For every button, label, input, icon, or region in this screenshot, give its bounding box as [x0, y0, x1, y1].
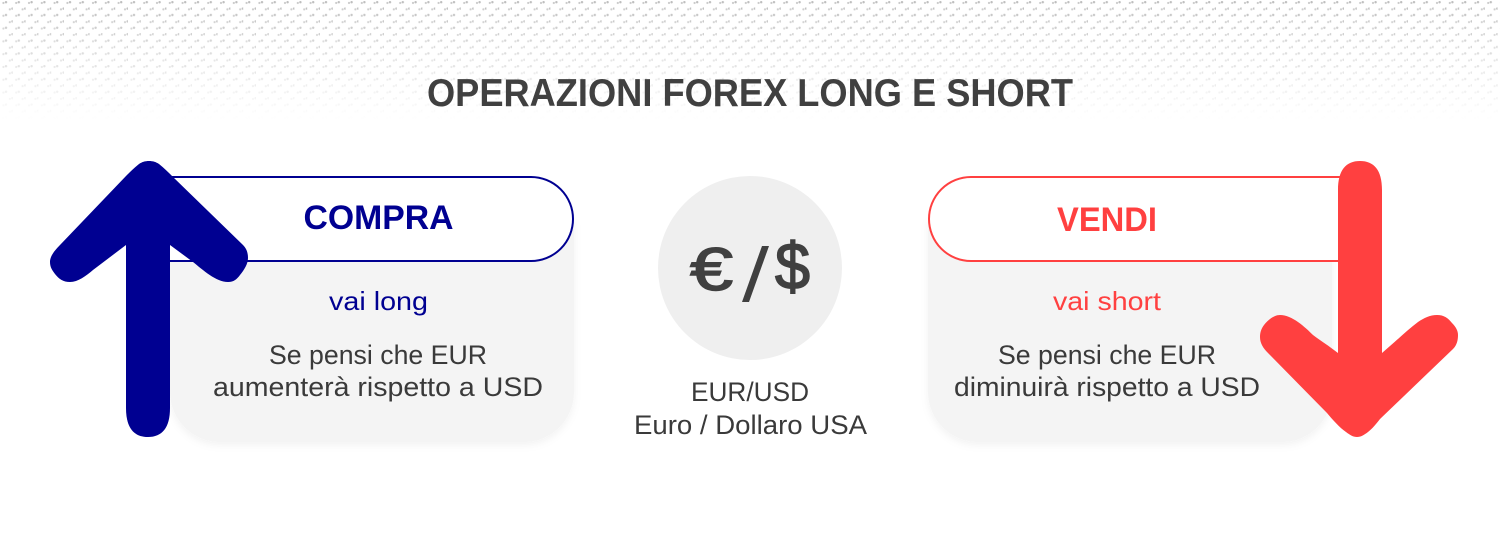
text: currency pair name: EUR/USD [691, 377, 809, 407]
button: vendi [929, 177, 1360, 261]
text: compra description: aumenterà rispetto a USD [213, 372, 543, 402]
text: vendi description [954, 340, 1260, 402]
text: vendi description: diminuirà rispetto a USD [954, 372, 1260, 402]
label: vai short: vai short [1053, 286, 1162, 316]
text: compra description: Se pensi che EUR [269, 340, 487, 370]
icon: blue up arrow [50, 161, 248, 437]
icon: euro dollar circle: € [690, 236, 733, 303]
text: compra description [213, 340, 543, 402]
button: compra: COMPRA [304, 199, 454, 237]
panel: vendi [928, 177, 1360, 442]
panel: compra [150, 177, 574, 442]
card: vendi background [928, 219, 1332, 442]
icon: euro dollar circle [658, 176, 842, 360]
text: vendi description: Se pensi che EUR [998, 340, 1216, 370]
button: vendi: VENDI [1057, 201, 1157, 239]
panel: currency pair [634, 176, 867, 440]
button: compra [150, 177, 573, 261]
icon: euro dollar circle: $ [775, 229, 810, 303]
label: vai long: vai long [329, 286, 428, 316]
text: currency pair name [634, 377, 867, 440]
icon: red down arrow [1260, 161, 1458, 437]
card: compra background [170, 219, 574, 442]
text: currency pair name: Euro / Dollaro USA [634, 410, 867, 440]
title: OPERAZIONI FOREX LONG E SHORT [427, 72, 1073, 115]
